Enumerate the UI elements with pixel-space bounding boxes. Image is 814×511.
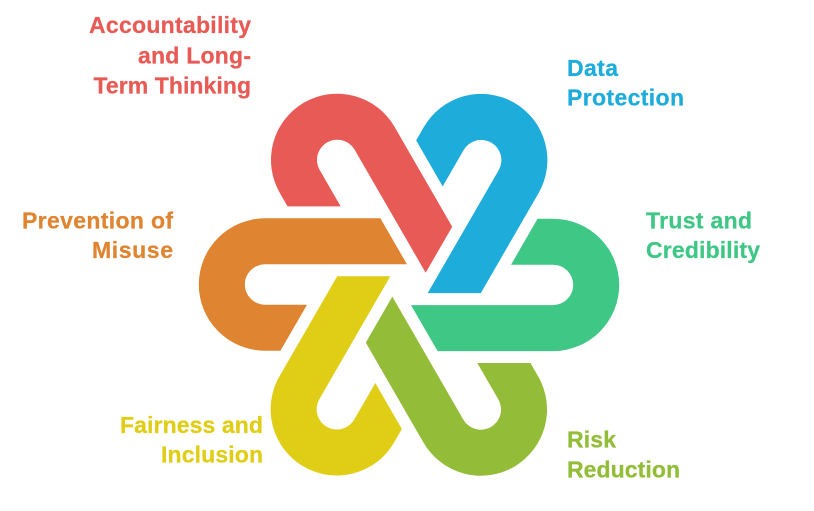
label: trust and credibility: Credibility — [646, 237, 760, 263]
label: prevention of misuse: Prevention of — [22, 208, 173, 234]
label: prevention of misuse — [22, 208, 173, 263]
label: fairness and inclusion: Inclusion — [161, 442, 263, 468]
label: data protection — [567, 55, 684, 110]
label: accountability and long-term thinking: and Long- — [138, 42, 251, 68]
link: trust and credibility (green) — [411, 219, 619, 351]
label: trust and credibility: Trust and — [646, 208, 752, 234]
label: accountability and long-term thinking: Accountability — [89, 12, 251, 38]
label: data protection: Protection — [567, 84, 684, 110]
label: trust and credibility — [646, 208, 760, 263]
label: fairness and inclusion — [120, 412, 263, 468]
label: prevention of misuse: Misuse — [92, 237, 173, 263]
link: accountability (red) — [247, 69, 466, 316]
link: fairness and inclusion (yellow) — [246, 253, 465, 500]
label: data protection: Data — [567, 55, 618, 81]
link: prevention of misuse (orange) — [199, 218, 407, 351]
label: accountability and long-term thinking: Term Thinking — [94, 72, 251, 98]
label: risk reduction: Risk — [567, 426, 616, 452]
label: fairness and inclusion: Fairness and — [120, 412, 263, 438]
link: data protection (blue) — [353, 70, 572, 316]
link: risk reduction (lime) — [352, 253, 571, 500]
label: risk reduction — [567, 426, 680, 482]
label: accountability and long-term thinking — [89, 12, 251, 98]
label: risk reduction: Reduction — [567, 456, 680, 482]
